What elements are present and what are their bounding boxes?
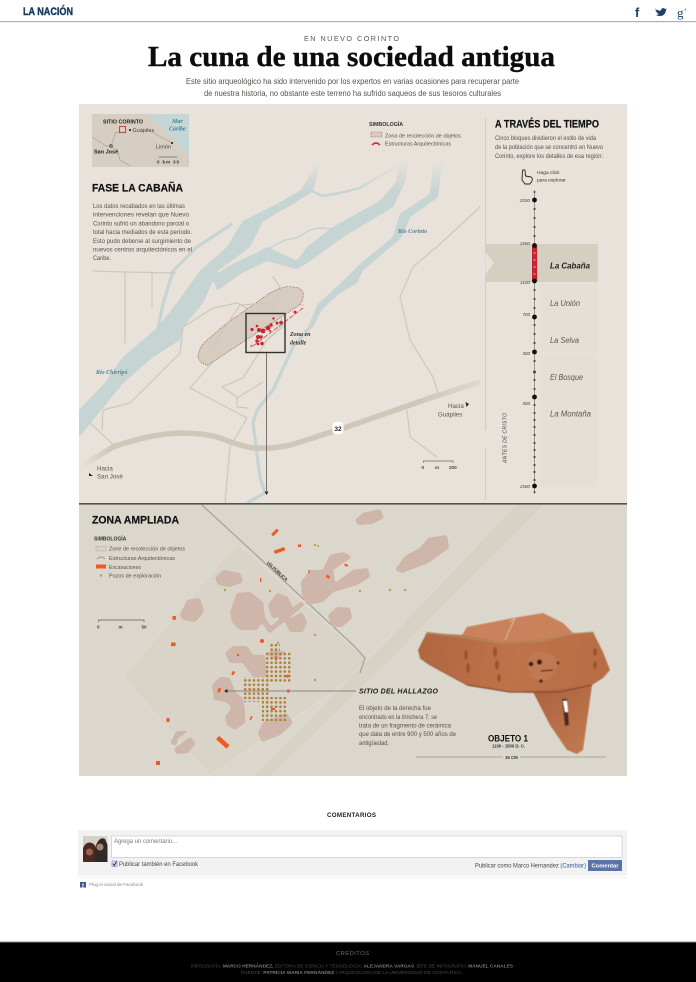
legend: site plan: Estructuras Arquitectónicas xyxy=(109,556,175,562)
text: timeline description: Cinco bloques dividieron el estilo de vida xyxy=(495,135,596,142)
era labels: La Cabaña xyxy=(550,262,591,270)
site plan: structures xyxy=(170,509,449,754)
year labels: 1500 xyxy=(520,241,530,246)
site plan: exploration pits grid xyxy=(243,643,291,721)
highway badge 32 xyxy=(332,422,344,434)
site plan scale xyxy=(97,620,147,630)
publish as: Publicar como Marco Hernandez (Cambiar) xyxy=(475,862,586,870)
legend: site plan xyxy=(94,534,185,580)
footer credits xyxy=(191,962,514,976)
year labels: 700 xyxy=(522,312,530,317)
panel divider xyxy=(79,503,627,505)
text: fase description: total hacia mediados de esta período. xyxy=(93,229,192,236)
label: hacia san jose: Hacia xyxy=(97,466,113,472)
label: zona en detalle: detalle xyxy=(290,340,307,346)
year labels: 2000 xyxy=(519,198,530,203)
legend: site plan: Excavaciones xyxy=(109,565,141,571)
footer heading: CRÉDITOS xyxy=(336,950,369,957)
label: zona en detalle: Zona en xyxy=(289,332,311,338)
comment button xyxy=(588,860,622,871)
text: find description: trata de un fragmento de cerámica xyxy=(359,722,452,730)
label: antes de cristo: ANTES DE CRISTO xyxy=(502,413,508,464)
heading: sitio del hallazgo: SITIO DEL HALLAZGO xyxy=(359,688,439,696)
avatar xyxy=(83,836,108,862)
icon: google plus: g xyxy=(677,5,684,20)
inset location map: SITIO CORINTO xyxy=(103,120,143,126)
label: hacia guapiles: Guápiles xyxy=(438,412,462,418)
image: ceramic fragment xyxy=(418,613,610,754)
year labels: 300 xyxy=(522,401,530,406)
label: hacia san jose xyxy=(89,466,123,480)
heading: a traves del tiempo: A TRAVÉS DEL TIEMPO xyxy=(495,118,599,130)
facebook plugin note xyxy=(80,882,144,890)
legend: upper map xyxy=(369,120,461,148)
inset location map: 0 km 30 xyxy=(157,160,179,164)
label: hacia san jose: San José xyxy=(97,474,123,480)
site plan scale: 50 xyxy=(142,624,147,630)
label: objeto 1: 1100 - 1500 D. C. xyxy=(492,744,525,748)
map scale: 200 xyxy=(449,465,457,470)
footer xyxy=(0,942,696,982)
subtitle xyxy=(186,77,520,98)
comment textarea: Agrega un comentario... xyxy=(114,839,177,845)
detail zone box xyxy=(246,314,285,352)
text: fase description: Los datos recabados en las últimas xyxy=(93,203,185,210)
arrow to detail map xyxy=(264,353,268,495)
kicker: EN NUEVO CORINTO xyxy=(304,34,399,43)
icon: click hand xyxy=(522,170,532,184)
label: rio corinto: Río Corinto xyxy=(397,229,427,235)
inset location map: Mar xyxy=(171,119,183,125)
highway badge 32: 32 xyxy=(334,426,342,433)
label: rio chirripo: Río Chirripó xyxy=(95,370,128,376)
label: objeto 1: OBJETO 1 xyxy=(488,734,529,744)
text: find description: El objeto de la derecha fue xyxy=(359,705,432,712)
map: architectural structures xyxy=(250,308,303,347)
legend: site plan: SIMBOLOGÍA xyxy=(94,534,127,542)
text: fase description: intervenciones revelan que Nuevo xyxy=(93,212,190,219)
inset location map xyxy=(92,114,189,167)
inset location map: Caribe xyxy=(169,126,186,132)
comment box xyxy=(78,830,627,878)
legend: site plan: Pozos de exploración xyxy=(109,574,161,580)
comment button: Comentar xyxy=(591,864,619,870)
era labels: El Bosque xyxy=(550,373,583,382)
text: fase description: Corinto sufrió un abandono parcial o xyxy=(93,220,190,227)
legend: upper map: Estructuras Arquitectónicas xyxy=(385,142,451,148)
site plan: terrain xyxy=(123,505,545,776)
label: via publica: VÍA PÚBLICA xyxy=(265,559,290,583)
text: fase description: Caribe. xyxy=(93,255,111,262)
text: find description xyxy=(359,705,457,747)
era labels: La Montaña xyxy=(550,410,592,418)
text: find description: antigüedad. xyxy=(359,740,389,747)
map scale: 0 xyxy=(422,465,424,470)
map: collection zone xyxy=(198,287,303,365)
era labels: La Unión xyxy=(550,299,581,308)
label: objeto 1 xyxy=(488,734,529,748)
year labels: 1500 xyxy=(520,484,530,489)
label: hacia guapiles xyxy=(438,402,469,418)
inset location map: Guápiles xyxy=(132,128,154,134)
label: zona en detalle xyxy=(289,332,311,346)
text: click hint: para explorar xyxy=(537,178,566,184)
year labels xyxy=(519,198,530,489)
site plan scale: m xyxy=(118,624,123,630)
heading: zona ampliada: ZONA AMPLIADA xyxy=(92,514,179,526)
footer credits: FUENTE: PATRICIA MARIA FERNÁNDEZ / ARQUEÓLOGA DE LA UNIVERSIDAD DE COSTA RICA. xyxy=(241,969,463,976)
text: timeline description: Corinto, explore los detalles de esa región: xyxy=(495,153,603,160)
panel: zona ampliada xyxy=(79,504,627,776)
text: fase description: Esto pudo deberse al surgimiento de xyxy=(93,238,192,245)
facebook plugin note: Plug-in social de Facebook xyxy=(89,882,144,887)
text: find description: que data de entre 900 y 500 años de xyxy=(359,731,457,738)
panel: timeline xyxy=(486,118,603,500)
text: fase description xyxy=(93,203,192,262)
icon: facebook: f xyxy=(635,5,640,20)
text: find description: encontrado en la trinchera 7; se xyxy=(359,714,437,721)
year labels: 1100 xyxy=(520,280,530,285)
heading: comentarios: COMENTARIOS xyxy=(327,812,376,819)
site plan: excavations xyxy=(156,529,348,765)
object scale: 15 CM xyxy=(505,755,518,760)
arrow: sitio del hallazgo xyxy=(224,689,356,693)
footer credits: INFOGRAFÍA: MARCO HERNÁNDEZ, EDITORA DE CIENCIA Y TECNOLOGÍA: ALEJANDRA VARGAS JEFE DE INFOGRAFÍA: MANUEL CANALES xyxy=(191,962,514,970)
map: roads xyxy=(90,207,480,503)
subtitle: de nuestra historia, no obstante este terreno ha sufrido saqueos de sus tesoros culturales xyxy=(204,89,501,98)
legend: upper map: Zona de recolección de objetos xyxy=(385,134,461,140)
year labels: 300 xyxy=(522,351,530,356)
site plan scale: 0 xyxy=(97,624,100,630)
inset location map: San José xyxy=(94,150,118,156)
text: fase description: nuevos centros arquitectónicos en el xyxy=(93,246,192,254)
site plan: isolated exploration pits xyxy=(224,544,406,681)
era bands xyxy=(486,244,598,486)
text: timeline description xyxy=(495,135,603,160)
subtitle: Este sitio arqueológico ha sido intervenido por los expertos en varias ocasiones para recuperar parte xyxy=(186,77,520,86)
map scale: m xyxy=(435,465,439,470)
map: highway xyxy=(80,382,480,467)
label: hacia guapiles: Hacia xyxy=(448,403,464,410)
text: click hint xyxy=(537,170,566,184)
timeline axis xyxy=(532,190,537,494)
title: La cuna de una sociedad antigua xyxy=(148,42,555,73)
logo: LA NACIÓN xyxy=(23,5,73,18)
icon: twitter xyxy=(655,8,667,16)
legend: upper map: SIMBOLOGÍA xyxy=(369,120,403,128)
era labels xyxy=(550,262,592,418)
map scale xyxy=(422,461,457,470)
legend: site plan: Zone de recolección de objetos xyxy=(109,546,185,552)
map: rivers xyxy=(76,150,460,503)
inset location map: Limón xyxy=(156,144,171,150)
facebook plugin note: f xyxy=(82,884,84,890)
era labels: La Selva xyxy=(550,336,580,345)
heading: fase la cabana: FASE LA CABAÑA xyxy=(92,182,183,194)
comment textarea xyxy=(112,836,622,858)
text: timeline description: de la población que se concentró en Nuevo xyxy=(495,144,603,151)
site plan: road via publica xyxy=(202,505,365,673)
facebook checkbox: Publicar también en Facebook xyxy=(119,861,199,868)
icon: google plus: + xyxy=(684,8,688,14)
text: click hint: Haga click xyxy=(537,170,560,176)
panel: upper map xyxy=(76,104,627,504)
header bar xyxy=(0,0,696,22)
